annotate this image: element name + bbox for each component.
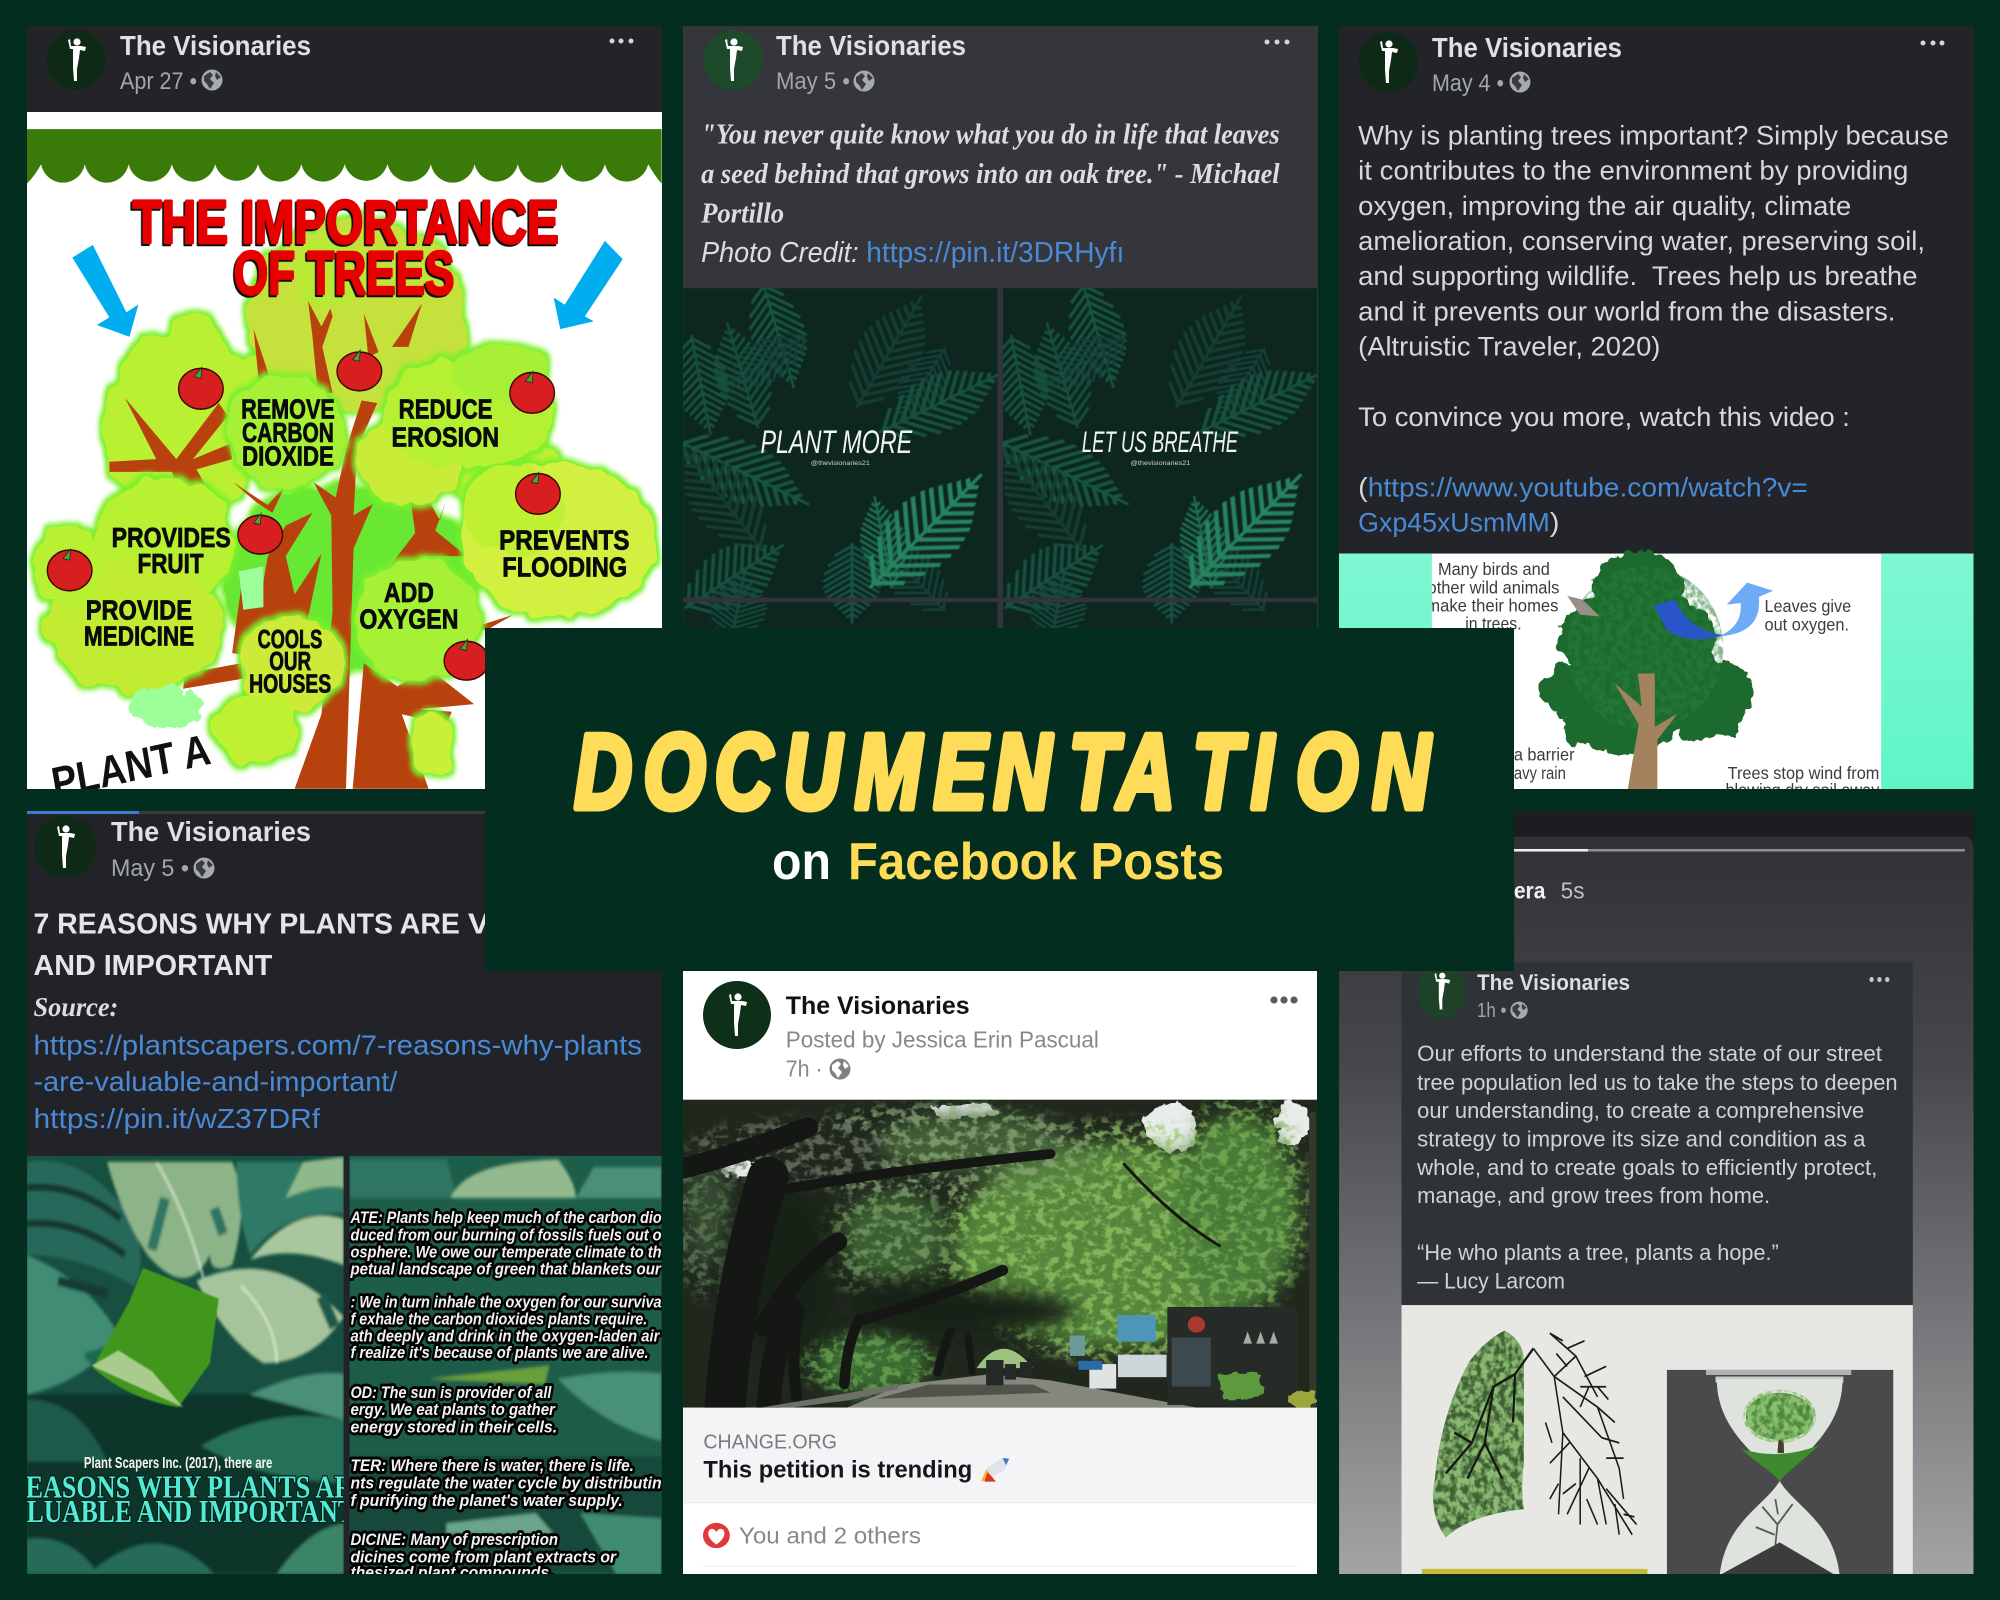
avatar [703,30,763,90]
trunks and branches [684,1115,1313,1407]
plant benefit text: osphere. We owe our temperate climate to th [350,1244,662,1262]
plant a tree slogan: PLANT A [48,725,214,808]
divider [683,1501,1317,1504]
source label: Source: [33,992,118,1023]
links [33,1029,642,1134]
shop signs [1070,1315,1167,1389]
hourglass frame [1706,1370,1851,1375]
avatar [1358,32,1418,92]
tree benefit labels: ADD [384,576,434,608]
body text: To convince you more, watch this video : [1358,402,1850,432]
page name: The Visionaries [1432,32,1622,63]
body text: and supporting wildlife. Trees help us breathe [1358,261,1918,292]
more menu [1920,40,1944,46]
youtube link line 2: Gxp45xUsmMM [1358,508,1550,538]
sky [721,1102,1310,1176]
bare tree [1756,1499,1793,1545]
diagram labels: make their homes [1426,596,1559,616]
story age: 5s [1561,877,1585,904]
page name: The Visionaries [786,991,970,1020]
avatar [1418,963,1465,1019]
post time: 1h • [1477,1000,1506,1022]
inner card [1402,962,1913,1305]
post text: “He who plants a tree, plants a hope.” [1417,1242,1779,1266]
body text: oxygen, improving the air quality, climate [1358,191,1851,221]
diagram labels: avy rain [1514,763,1566,783]
plant benefit text: ATE: Plants help keep much of the carbon dio [350,1209,662,1227]
heading: AND IMPORTANT [33,949,273,981]
plant benefit text: ergy. We eat plants to gather [350,1401,556,1419]
body text: (Altruistic Traveler, 2020) [1358,332,1660,362]
tree branches and trunk [109,301,513,789]
green scalloped awning [27,129,662,184]
diagram labels: out oxygen. [1764,614,1849,635]
tree benefit labels: REDUCE [399,393,492,425]
more menu [1869,977,1889,982]
icon: globe [830,1058,850,1080]
quote text: "You never quite know what you do in life that leaves [701,118,1280,150]
tree benefit labels [84,393,629,699]
diagram labels: other wild animals [1428,577,1559,598]
links: https://plantscapers.com/7-reasons-why-plants [33,1029,642,1061]
body text [1358,121,1949,538]
icon: globe [202,70,222,90]
quote text: a seed behind that grows into an oak tree." - Michael [701,157,1280,190]
diagram labels: blowing dry soil away [1725,780,1880,800]
fern image: let us breathe [976,275,1336,645]
panel: story post with lungs and hourglass [1339,811,1974,1591]
post body and tree diagram [1339,121,1974,800]
heading: 7 REASONS WHY PLANTS ARE [33,908,460,940]
page name: The Visionaries [776,30,966,61]
oxygen arrow [1654,583,1773,639]
youtube link line 1: https://www.youtube.com/watch?v= [1368,473,1808,503]
upper soil [1742,1445,1819,1481]
plant benefit text: duced from our burning of fossils fuels out o [350,1227,662,1245]
post text: whole, and to create goals to efficiently protect, [1416,1157,1877,1180]
avatar [46,30,106,90]
panel: seven reasons post [7,811,662,1583]
links: -are-valuable-and-important/ [33,1065,398,1098]
plant benefit text: nts regulate the water cycle by distributin [350,1474,662,1493]
body text: it contributes to the environment by providing [1358,156,1908,186]
fern handle 2: @thevisionaries21 [1131,460,1191,467]
diagram background [1339,554,1974,793]
yellow caption strip [1422,1569,1647,1582]
pale leaf tip [92,1350,183,1407]
mint side band right [1881,554,1974,793]
link preview footer [683,1408,1317,1503]
dark canopy shade [725,1189,1076,1352]
quote text: Portillo [700,197,784,229]
post body [673,991,1319,1567]
tree crown back [103,219,558,668]
fern handle 1: @thevisionaries21 [811,460,870,467]
plant benefit text: energy stored in their cells. [350,1419,557,1437]
cars [986,1360,1032,1385]
post date: Apr 27 • [120,68,197,95]
heading [33,908,642,981]
photo credit: Photo Credit: [701,237,859,269]
heading: VALUABLE [468,908,642,940]
center title panel [485,628,1514,971]
diagram tree highlights [1567,566,1723,730]
lungs: bare branch lobe [1533,1333,1637,1535]
avatar [34,816,96,878]
plant benefit text: DICINE: Many of prescription [350,1531,558,1549]
reasons headline: LUABLE AND IMPORTANT [27,1494,355,1529]
diagram labels: in trees. [1465,613,1522,634]
monstera photo right [350,1156,662,1583]
panel: importance of trees post [27,26,662,808]
tree crown front [33,344,656,778]
body text: amelioration, conserving water, preserving soil, [1358,226,1925,256]
hourglass panel [1667,1370,1893,1589]
plant benefit text: f realize it's because of plants we are alive. [350,1344,649,1362]
leaf shapes [350,1159,662,1574]
upper bulb [1717,1379,1843,1481]
story author: era [1514,877,1546,904]
plant benefit text: f exhale the carbon dioxides plants require. [350,1311,647,1329]
tree benefit labels: COOLS [258,626,322,654]
post date: May 5 • [776,68,850,95]
body and images [7,908,662,1583]
panel: petition post [673,971,1319,1574]
diagram tree foliage [1541,551,1754,753]
leaf shapes [27,1157,344,1574]
photo credit link: https://pin.it/3DRHyfı [866,237,1124,269]
story card gradient [1339,837,1974,1587]
post body [1339,837,1974,1591]
body text: ( [1358,473,1368,503]
roadside building [1167,1307,1297,1405]
more menu [610,38,634,44]
plant benefit text: thesized plant compounds. [350,1564,554,1583]
plant benefit text: dicines come from plant extracts or [350,1549,617,1567]
panel: why plant trees post [1339,26,1974,800]
soft foliage tones [686,1115,1297,1393]
icon: globe [854,70,874,92]
links: https://pin.it/wZ37DRf [33,1102,321,1134]
reasons headline [7,1470,371,1529]
post text: tree population led us to take the steps to deepen [1417,1071,1898,1095]
tree benefit labels: MEDICINE [84,620,194,652]
more menu [1270,996,1298,1004]
arrow right [554,241,623,329]
page name: The Visionaries [111,816,311,847]
tree benefit labels: FRUIT [138,547,204,579]
post header bar [27,26,662,112]
street trees photo [673,1091,1319,1408]
arrow left [72,245,138,337]
image area [1402,1305,1913,1591]
tree benefit labels: PROVIDES [112,521,231,553]
apples [47,352,560,680]
tree benefit labels: PREVENTS [499,524,629,556]
foliage speckle [673,1091,1310,1397]
tree benefit labels: EROSION [392,421,499,453]
post date: May 5 • [111,855,189,882]
post text: manage, and grow trees from home. [1417,1185,1770,1208]
page name: The Visionaries [1477,970,1630,995]
diagram labels: Leaves give [1764,596,1851,617]
plant benefit text [350,1209,662,1583]
fern caption: plant more: PLANT MORE [760,424,913,461]
lower bulb [1719,1481,1840,1589]
diagram labels: Trees stop wind from [1728,763,1879,783]
quote and images [656,118,1336,645]
diagram tree trunk [1615,673,1678,793]
tree benefit labels: REMOVE [241,393,335,425]
post text: Our efforts to understand the state of our street [1417,1043,1882,1067]
plant benefit text: : We in turn inhale the oxygen for our surviva [350,1294,662,1312]
icon: globe [1510,72,1530,92]
reactions count: You and 2 others [739,1523,921,1549]
quote text [700,118,1280,229]
panel: quote post with fern images [656,26,1336,645]
lungs: green lobe [1433,1331,1533,1537]
page name: The Visionaries [120,30,311,61]
more menu [1264,40,1290,44]
diagram bird [1567,596,1600,616]
post text [1416,1043,1898,1294]
apple leaves [63,350,539,651]
tree benefit labels: CARBON [242,416,334,448]
plant benefit text: ath deeply and drink in the oxygen-laden air [350,1328,660,1346]
tree benefit labels: HOUSES [249,670,331,699]
post text: — Lucy Larcom [1417,1270,1565,1294]
body text: ) [1550,508,1559,538]
fern caption: let us breathe: LET US BREATHE [1082,425,1238,459]
icon: globe [194,858,214,878]
roadside shrubs [1217,1372,1319,1408]
post time: 7h · [786,1056,823,1081]
plant benefit text: OD: The sun is provider of all [350,1384,552,1402]
plant benefit text: f purifying the planet's water supply. [350,1492,623,1510]
poster title: THE IMPORTANCE [133,189,559,257]
fern image: plant more [656,275,1016,645]
subtitle: Facebook Posts [848,833,1224,891]
icon: globe [1510,1002,1528,1019]
body text: and it prevents our world from the disasters. [1358,297,1895,327]
story progress bar [1339,849,1965,852]
icon: heart reaction [703,1523,730,1548]
mint side band left [1339,554,1432,793]
diagram labels [1426,559,1880,800]
poster title: OF TREES [234,240,454,308]
plant benefit text: TER: Where there is water, there is life. [350,1457,634,1475]
grid gutters [683,288,1318,631]
source domain: CHANGE.ORG [703,1431,837,1453]
tree benefit labels: OUR [269,648,311,676]
divider [703,1565,1297,1568]
post date: May 4 • [1432,70,1504,97]
lower soil [1719,1542,1836,1576]
small green tree [1743,1390,1816,1453]
diagram labels: a barrier [1514,745,1575,765]
petition headline: This petition is trending [703,1456,972,1483]
post text: our understanding, to create a comprehensive [1417,1100,1864,1123]
avatar [703,981,771,1049]
poster title [130,198,558,298]
monstera photo left [7,1156,371,1574]
tree benefit labels: DIOXIDE [242,440,334,472]
story progress bar [27,811,485,814]
subtitle: on [772,833,831,891]
tree benefit labels: OXYGEN [359,603,458,635]
icon: rocket [981,1458,1009,1482]
tunnel light and road [760,1349,1198,1408]
tree benefit labels: FLOODING [502,551,627,583]
reasons headline: REASONS WHY PLANTS ARE [7,1470,371,1505]
diagram labels: Many birds and [1438,559,1550,579]
title: documentation: DOCUMENTATION [575,712,1432,831]
bright green leaf [94,1268,219,1407]
light foliage bottom [127,686,203,727]
plant benefit text: petual landscape of green that blankets our [350,1261,661,1279]
light mint foliage [239,566,263,610]
reasons overlay text: Plant Scapers Inc. (2017), there are [84,1455,272,1472]
tree benefit labels: PROVIDE [86,594,192,626]
tree poster artwork [27,129,662,808]
post text: strategy to improve its size and condition as a [1417,1128,1866,1152]
posted by: Posted by Jessica Erin Pascual [786,1027,1099,1053]
body text: Why is planting trees important? Simply because [1358,121,1949,151]
